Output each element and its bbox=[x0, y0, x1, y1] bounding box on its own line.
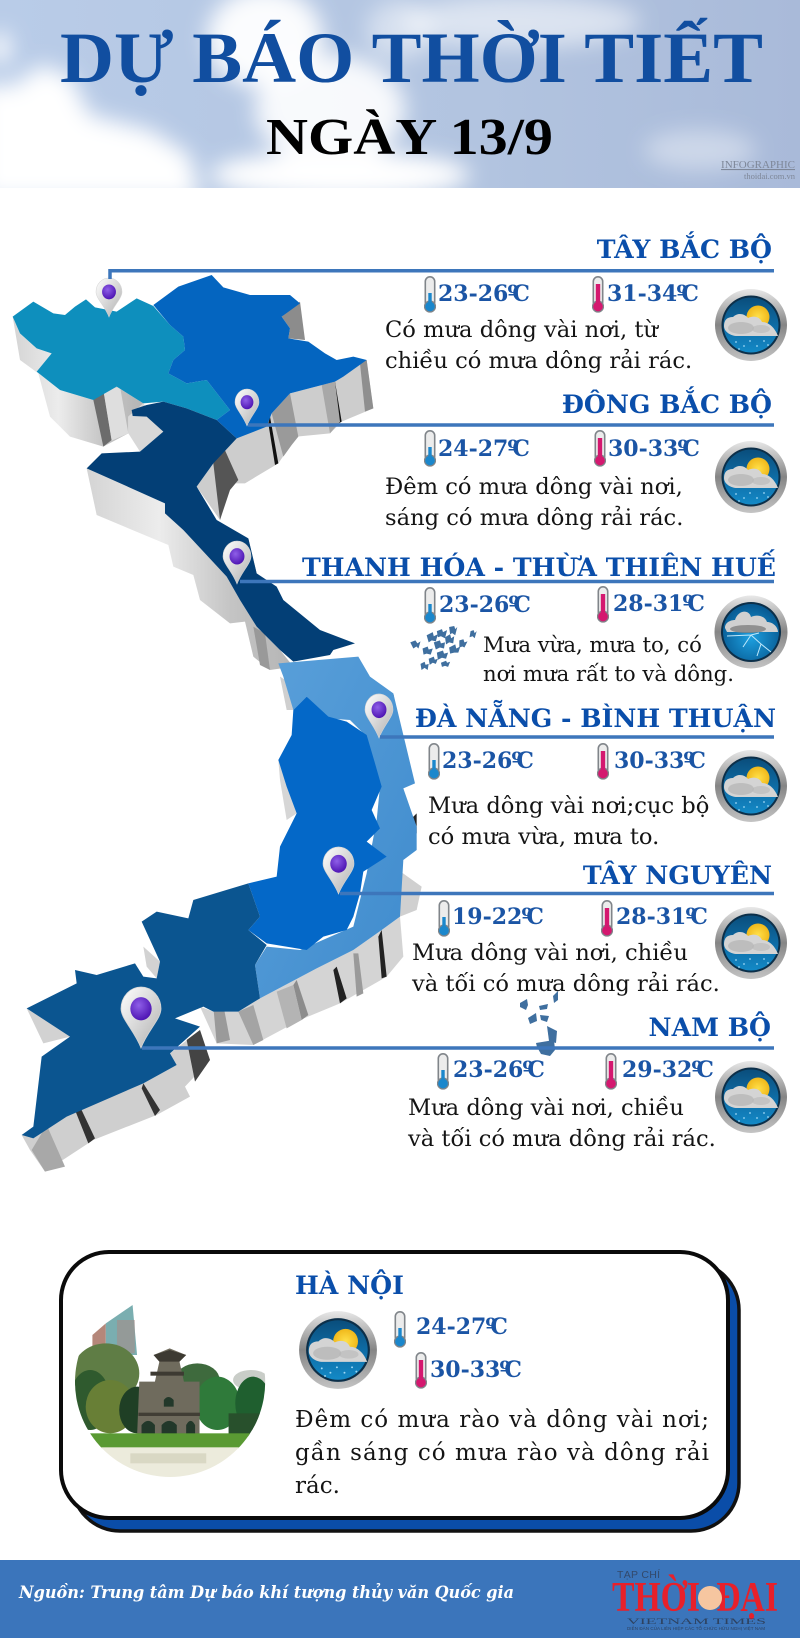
heading: NAM BỘ bbox=[649, 1009, 771, 1042]
description bbox=[385, 317, 692, 374]
description: có mưa vừa, mưa to. bbox=[428, 824, 659, 850]
icon: rain and sun bbox=[715, 441, 787, 513]
map of Vietnam bbox=[13, 275, 422, 1172]
heading: THANH HÓA - THỪA THIÊN HUẾ bbox=[302, 548, 776, 582]
leader line bbox=[240, 580, 774, 583]
low temperature: 24-27ºC bbox=[438, 436, 530, 462]
icon: rain and sun bbox=[299, 1311, 377, 1389]
high temperature: 31-34ºC bbox=[607, 281, 699, 307]
source text: Nguồn: Trung tâm Dự báo khí tượng thủy văn Quốc gia bbox=[18, 1583, 514, 1602]
title: DỰ BÁO THỜI TIẾT bbox=[60, 17, 763, 98]
high temperature bbox=[592, 277, 699, 312]
description bbox=[411, 940, 720, 997]
heading: HÀ NỘI bbox=[295, 1267, 404, 1300]
map: southern regions bbox=[22, 657, 422, 1172]
high temperature: 28-31ºC bbox=[613, 591, 705, 617]
icon: rain and sun bbox=[715, 1061, 787, 1133]
icon: rain and sun bbox=[715, 289, 787, 361]
panel: Nam Bộ bbox=[142, 1009, 787, 1152]
header banner bbox=[0, 0, 800, 200]
description: Mưa dông vài nơi, chiều bbox=[412, 940, 688, 966]
logo: Thời Đại: DIỄN ĐÀN CỦA LIÊN HIỆP CÁC TỔ CHỨC HỮU NGHỊ VIỆT NAM bbox=[627, 1624, 765, 1631]
low temperature bbox=[438, 1054, 545, 1089]
low temperature: 24-27ºC bbox=[416, 1314, 508, 1340]
panel: Đà Nẵng - Bình Thuận bbox=[380, 699, 787, 850]
description: Có mưa dông vài nơi, từ bbox=[385, 317, 659, 343]
icon: thunderstorm bbox=[714, 596, 788, 668]
low temperature bbox=[424, 431, 530, 466]
card body bbox=[61, 1252, 728, 1518]
panel: Thanh Hóa - Thừa Thiên Huế bbox=[240, 548, 788, 686]
icon: rain and sun bbox=[715, 750, 787, 822]
description: Đêm có mưa dông vài nơi, bbox=[385, 474, 683, 500]
pin: Đà Nẵng - Bình Thuận bbox=[365, 694, 393, 738]
subtitle: date: NGÀY 13/9 bbox=[266, 108, 553, 166]
photo: Turtle Tower bbox=[75, 1305, 266, 1477]
watermark: INFOGRAPHIC bbox=[721, 159, 795, 171]
leader line bbox=[340, 892, 774, 895]
logo: Thời Đại bbox=[612, 1568, 778, 1631]
pin: Tây Nguyên bbox=[323, 847, 354, 894]
high temperature: 28-31ºC bbox=[616, 904, 708, 930]
rain clump decoration bbox=[410, 626, 477, 670]
panel: Tây Nguyên bbox=[340, 859, 787, 997]
high temperature bbox=[606, 1054, 714, 1089]
description: và tối có mưa dông rải rác. bbox=[407, 1126, 716, 1152]
high temperature bbox=[416, 1353, 522, 1388]
heading: TÂY NGUYÊN bbox=[583, 859, 772, 890]
description: Mưa dông vài nơi;cục bộ bbox=[428, 793, 709, 819]
leader line bbox=[248, 423, 774, 427]
high temperature: 30-33ºC bbox=[608, 436, 700, 462]
low temperature bbox=[428, 744, 534, 779]
description: Mưa dông vài nơi, chiều bbox=[408, 1095, 684, 1121]
low temperature bbox=[394, 1312, 508, 1347]
logo: Thời Đại: THỜI bbox=[612, 1574, 700, 1621]
panel: Hà Nội card bbox=[61, 1252, 739, 1531]
low temperature: 23-26ºC bbox=[438, 281, 530, 307]
map: northern regions bbox=[13, 275, 373, 670]
logo: Thời Đại: TẠP CHÍ bbox=[617, 1568, 660, 1581]
low temperature: 23-26ºC bbox=[453, 1057, 545, 1083]
card shadow bbox=[72, 1262, 739, 1531]
pin: Đông Bắc bbox=[235, 389, 259, 426]
leader line bbox=[380, 735, 774, 739]
watermark bbox=[721, 159, 796, 181]
description: và tối có mưa dông rải rác. bbox=[411, 971, 720, 997]
logo: Thời Đại: ĐẠI bbox=[716, 1575, 778, 1621]
heading: TÂY BẮC BỘ bbox=[597, 230, 772, 264]
description: Mưa vừa, mưa to, có bbox=[483, 632, 702, 657]
low temperature bbox=[438, 901, 544, 936]
low temperature: 23-26ºC bbox=[439, 592, 531, 618]
low temperature bbox=[424, 277, 530, 312]
pin: Thanh Hóa - Huế bbox=[223, 541, 251, 584]
description: rác. bbox=[295, 1473, 340, 1499]
description: Đêm có mưa rào và dông vài nơi; bbox=[295, 1407, 709, 1433]
pin: Nam Bộ bbox=[121, 987, 161, 1048]
description: nơi mưa rất to và dông. bbox=[483, 661, 734, 686]
high temperature bbox=[594, 431, 700, 466]
high temperature: 30-33ºC bbox=[614, 748, 706, 774]
description bbox=[385, 474, 683, 531]
rain clump decoration near Nam Bộ bbox=[520, 991, 558, 1056]
low temperature bbox=[424, 588, 531, 623]
low temperature: 23-26ºC bbox=[442, 748, 534, 774]
leader line bbox=[110, 271, 774, 279]
high temperature bbox=[598, 744, 706, 779]
high temperature bbox=[598, 587, 705, 622]
description bbox=[295, 1407, 709, 1499]
panel: Tây Bắc Bộ bbox=[110, 230, 787, 374]
description bbox=[428, 793, 709, 850]
heading: ĐÀ NẴNG - BÌNH THUẬN bbox=[415, 699, 776, 733]
high temperature: 29-32ºC bbox=[622, 1057, 714, 1083]
description: gần sáng có mưa rào và dông rải bbox=[295, 1440, 709, 1466]
description: sáng có mưa dông rải rác. bbox=[385, 505, 683, 531]
description: chiều có mưa dông rải rác. bbox=[385, 348, 692, 374]
leader line bbox=[142, 1046, 774, 1050]
heading: ĐÔNG BẮC BỘ bbox=[562, 385, 772, 419]
footer bar bbox=[0, 1560, 800, 1638]
description bbox=[483, 632, 734, 686]
icon: rain and sun bbox=[715, 907, 787, 979]
high temperature: 30-33ºC bbox=[430, 1357, 522, 1383]
description bbox=[407, 1095, 716, 1152]
high temperature bbox=[602, 901, 708, 936]
watermark: thoidai.com.vn bbox=[744, 171, 796, 181]
low temperature: 19-22ºC bbox=[452, 904, 544, 930]
panel: Đông Bắc Bộ bbox=[248, 385, 787, 531]
pin: Tây Bắc bbox=[96, 278, 122, 317]
logo: Thời Đại: VIETNAM TIMES bbox=[627, 1616, 767, 1626]
